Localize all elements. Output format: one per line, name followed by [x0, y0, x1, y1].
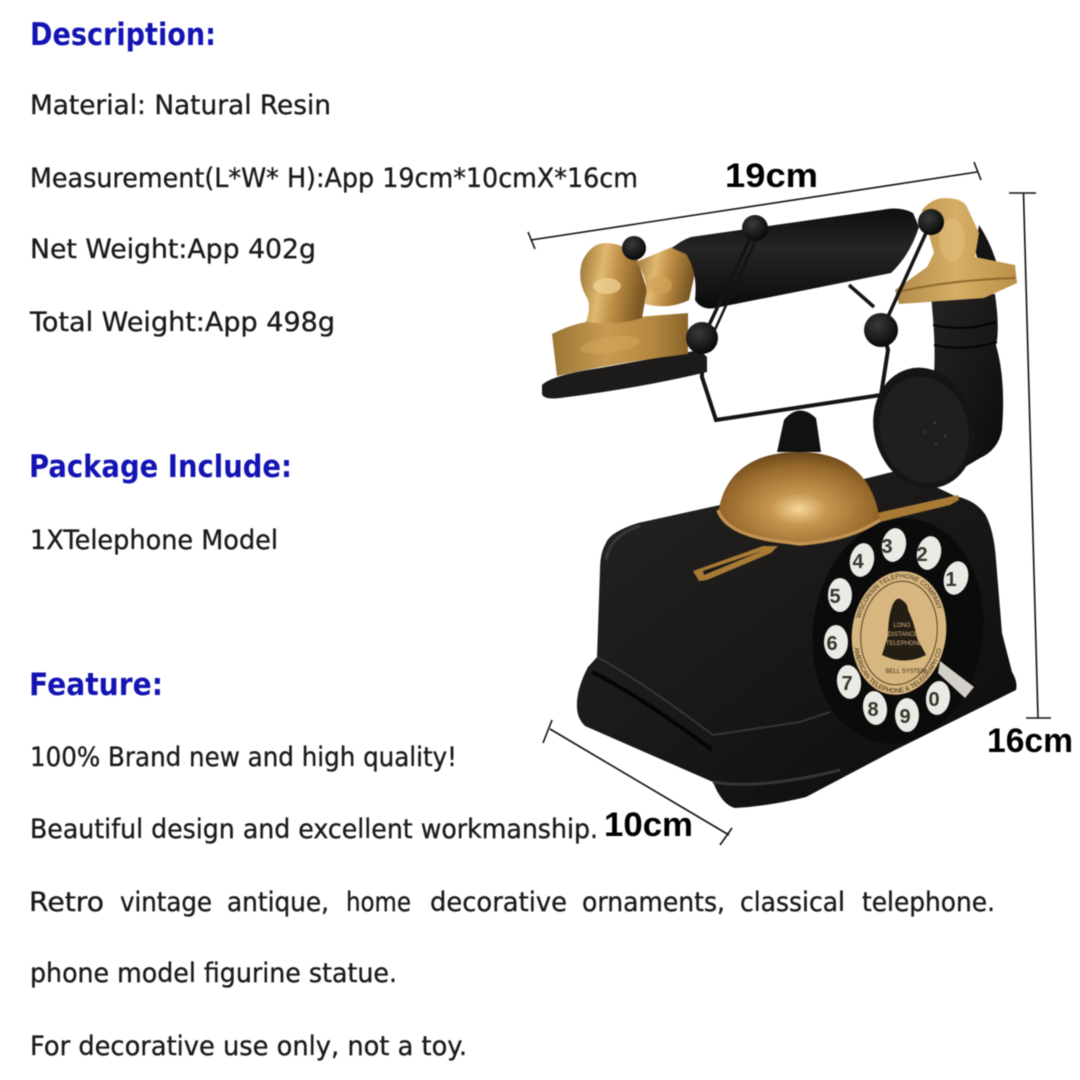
dimension: 19cm width: 19cm	[725, 157, 818, 195]
heading: Feature: Feature:	[29, 667, 163, 703]
mouthpiece	[860, 356, 988, 500]
dial number holes: 2	[916, 544, 928, 566]
dimension: 19cm width	[528, 157, 981, 249]
dial centre label: DISTANCE	[888, 632, 918, 638]
text: package contents: 1XTelephone Model	[30, 525, 278, 556]
handset cradle rods	[702, 222, 931, 345]
illustration: vintage telephone	[541, 197, 1018, 809]
text: feature line 4: phone model figurine statue.	[30, 958, 397, 989]
text: measurement: Measurement(L*W* H):App 19cm*10cmX*16cm	[30, 163, 638, 194]
dial number holes: 1	[945, 569, 957, 591]
dial number holes: 5	[829, 586, 841, 608]
dial centre label	[850, 570, 948, 696]
dial number holes: 8	[867, 699, 879, 721]
text: feature line 3: ornaments,	[582, 887, 725, 918]
dial centre label: WISCONSIN TELEPHONE COMPANY	[856, 573, 942, 618]
bell stem	[777, 410, 821, 452]
dimension: 10cm depth	[543, 720, 732, 845]
gold trim strips	[693, 495, 959, 581]
text: feature line 2: Beautiful design and excellent workmanship.	[30, 814, 598, 845]
dial number holes: 6	[826, 633, 838, 655]
dial number holes: 3	[881, 536, 893, 558]
text: feature line 3: classical	[740, 887, 845, 918]
dimension: 16cm height: 16cm	[987, 722, 1073, 760]
text: feature line 3: home	[346, 887, 411, 918]
dimension: 10cm depth: 10cm	[604, 806, 693, 844]
dial number holes: 4	[852, 551, 864, 573]
dial number holes: 7	[841, 673, 853, 695]
text: total weight: Total Weight:App 498g	[29, 307, 335, 338]
text: feature line 3: vintage	[120, 887, 212, 918]
text: feature line 3: antique,	[227, 887, 329, 918]
text: feature line 1: 100% Brand new and high quality!	[30, 742, 457, 773]
gold bell	[718, 452, 880, 544]
coiled cord and receiver tube	[931, 225, 1003, 470]
cradle balls	[622, 209, 944, 354]
phone base	[577, 470, 1016, 808]
dial number holes	[824, 526, 972, 732]
section: package include	[29, 449, 292, 556]
section: description	[29, 17, 638, 338]
dial number holes: 9	[899, 706, 911, 728]
left ear cup with gold dome	[542, 243, 707, 398]
dial centre label: TELEPHONE	[886, 641, 922, 647]
heading: Package Include: Package Include:	[29, 449, 292, 485]
heading: Description: Description:	[30, 17, 216, 53]
text: feature line 3: Retro	[29, 887, 104, 918]
text: material: Material: Natural Resin	[30, 90, 331, 121]
rotary dial	[812, 518, 983, 733]
text: feature line 5: For decorative use only, not a toy.	[30, 1031, 467, 1062]
dial centre label: BELL SYSTEM	[886, 669, 926, 675]
text: net weight: Net Weight:App 402g	[30, 234, 316, 265]
finger stop	[938, 661, 974, 698]
text: feature line 3: decorative	[430, 887, 567, 918]
right ear cup with gold dome	[895, 198, 1017, 304]
text: feature line 3	[29, 887, 995, 918]
section: feature	[29, 667, 995, 1062]
text: feature line 3: telephone.	[862, 887, 995, 918]
receiver handle	[672, 209, 919, 308]
dimension: 16cm height	[987, 193, 1073, 760]
dial number holes: 0	[928, 689, 940, 711]
lower cradle frame	[702, 335, 888, 420]
dial centre label: LONG	[893, 623, 911, 629]
